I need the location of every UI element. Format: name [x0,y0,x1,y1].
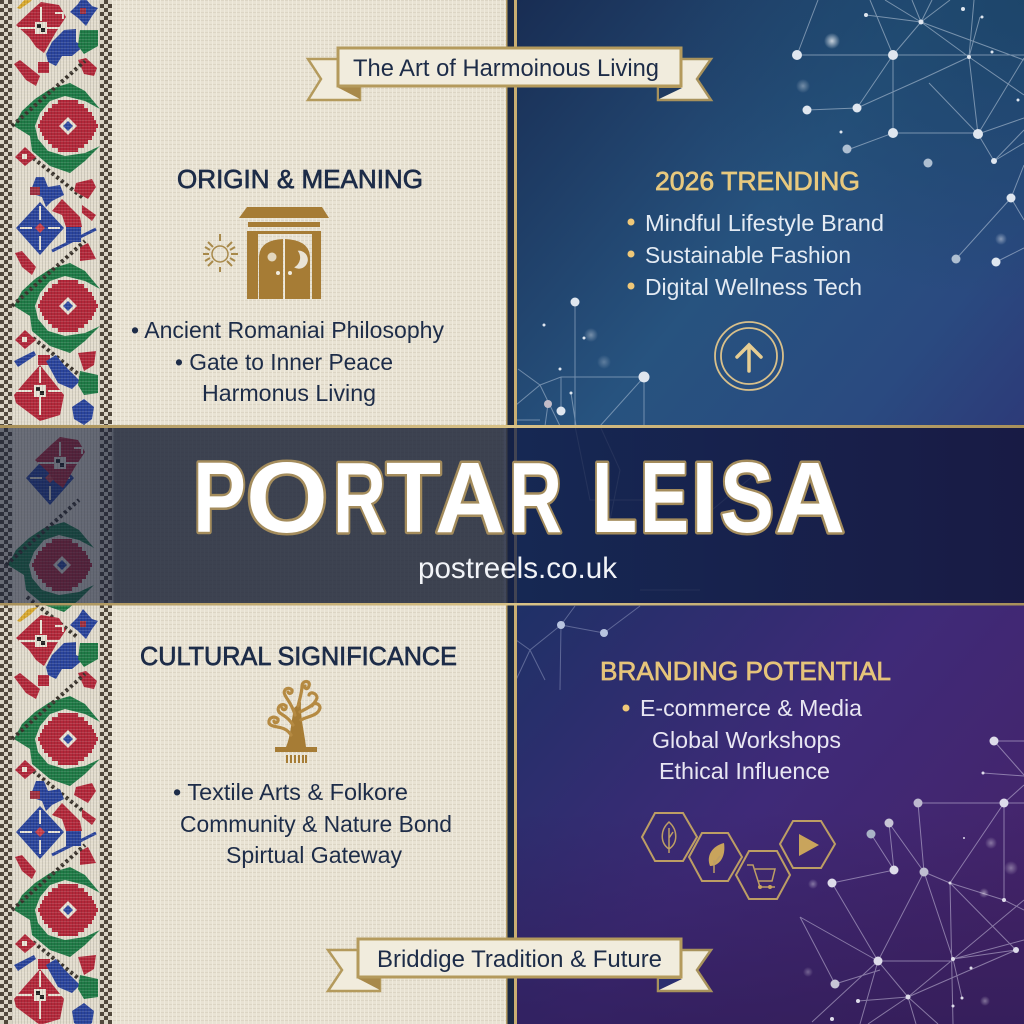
heading: CULTURAL SIGNIFICANCE [140,641,457,671]
main title: O [246,442,328,554]
bullet list: • Textile Arts & Folkore [173,779,408,805]
network: bottom right constellation [516,606,1024,1024]
section: cultural significance [140,641,457,868]
main title: P [193,442,246,554]
bullet list [622,695,862,784]
main title: I [691,442,717,554]
section: 2026 trending [628,166,884,390]
website url: postreels.co.uk [418,552,618,585]
bullet list [173,779,452,868]
bullet list [131,317,444,406]
main title: R [333,442,386,554]
bullet list: • Gate to Inner Peace [175,349,393,375]
main title: L [592,442,637,554]
icon: up arrow in circle [715,322,783,390]
panel: embroidered folk border [0,0,112,1024]
bullet list: Ethical Influence [659,758,830,784]
panel: top right navy background [508,0,1024,430]
icons: hexagon row [642,813,835,899]
heading: 2026 TRENDING [655,166,860,196]
bullet list: Sustainable Fashion [645,242,851,268]
heading: ORIGIN & MEANING [177,164,423,194]
main title: T [386,442,441,554]
section: origin and meaning [131,164,444,406]
bottom ribbon banner [328,939,711,991]
network: top right constellation [510,0,1024,590]
bullet list: • Ancient Romaniai Philosophy [131,317,444,343]
bullet list [628,210,884,300]
heading: BRANDING POTENTIAL [600,656,891,686]
main title: E [640,442,689,554]
icon: tree on column [269,682,320,763]
ribbon text: Briddige Tradition & Future [377,946,662,973]
main title: S [720,442,774,554]
top ribbon banner [308,48,711,100]
main title: A [775,442,845,554]
icon: gate with sun [203,207,329,299]
bullet list: Global Workshops [652,727,841,753]
bullet list: E-commerce & Media [640,695,862,721]
bullet list: Digital Wellness Tech [645,274,862,300]
bullet list: Harmonus Living [202,380,376,406]
main title: A [435,442,505,554]
panel: linen background [0,0,508,1024]
bullet list: Spirtual Gateway [226,842,403,868]
main title: R [509,442,562,554]
title band [0,425,1024,606]
ribbon text: The Art of Harmoinous Living [353,55,659,82]
panel: bottom right purple background [508,425,1024,1024]
bullet list: Mindful Lifestyle Brand [645,210,884,236]
center divider [506,0,517,1024]
bullet list: Community & Nature Bond [180,811,452,837]
section: branding potential [600,656,891,899]
